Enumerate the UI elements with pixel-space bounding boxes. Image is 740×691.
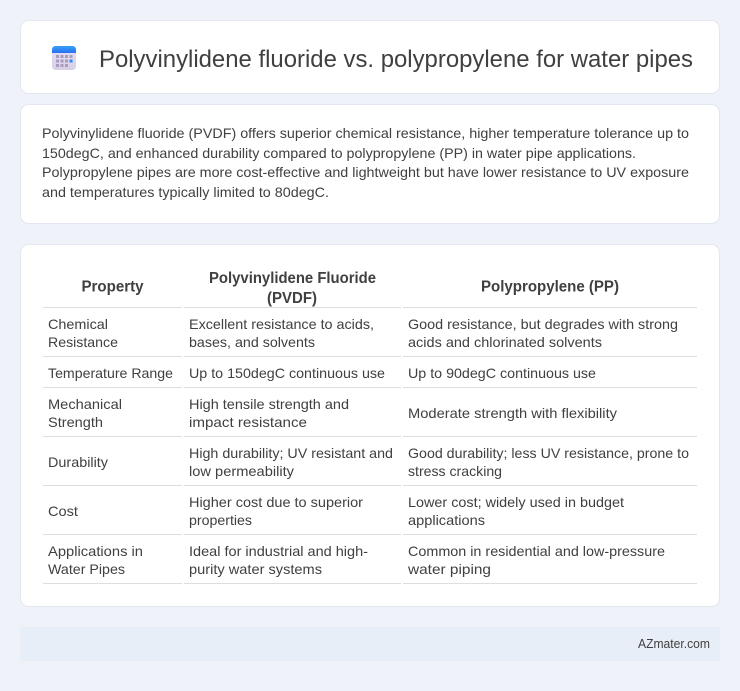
table header — [82, 270, 619, 307]
footer credit: AZmater.com — [638, 637, 710, 651]
row: chemical resistance: Resistance — [48, 334, 118, 350]
panel: summary — [20, 104, 720, 224]
title: Polyvinylidene fluoride vs. polypropylene for water pipes — [99, 46, 693, 73]
row: applications in water pipes: water piping — [407, 561, 491, 577]
table header: (PVDF) — [267, 290, 317, 307]
row: mechanical strength: High tensile strength and — [189, 396, 349, 412]
row: mechanical strength — [48, 396, 617, 430]
row: applications in water pipes: purity water systems — [189, 561, 322, 577]
row: mechanical strength: Mechanical — [48, 396, 122, 412]
row: durability: High durability; UV resistant and — [189, 445, 393, 461]
row: cost — [48, 494, 624, 528]
panel: title card — [20, 20, 720, 94]
row: chemical resistance: bases, and solvents — [189, 334, 315, 350]
row: cost: Cost — [48, 503, 78, 519]
row: mechanical strength: Moderate strength with flexibility — [408, 405, 617, 421]
row: temperature range: Temperature Range — [48, 365, 173, 381]
table header: Polyvinylidene Fluoride — [209, 270, 376, 287]
row: applications in water pipes: Common in residential and low-pressure — [408, 543, 665, 559]
row: cost: properties — [189, 512, 252, 528]
row: temperature range — [48, 365, 596, 381]
row: cost: applications — [408, 512, 485, 528]
table header: Polypropylene (PP) — [481, 278, 619, 296]
row: applications in water pipes: Water Pipes — [48, 561, 125, 577]
row: chemical resistance: Excellent resistance to acids, — [189, 316, 374, 332]
summary text: 150degC, and enhanced durability compared to polypropylene (PP) in water pipe applications. — [42, 145, 636, 161]
row: cost: Lower cost; widely used in budget — [408, 494, 624, 510]
row: chemical resistance: Chemical — [48, 316, 108, 332]
row: temperature range: Up to 150degC continuous use — [189, 365, 385, 381]
summary text: and temperatures typically limited to 80degC. — [42, 184, 329, 200]
summary text — [42, 125, 689, 200]
row: chemical resistance — [48, 316, 678, 350]
row: durability: Durability — [48, 454, 108, 470]
row: mechanical strength: impact resistance — [189, 414, 307, 430]
table header: Property — [82, 278, 144, 296]
summary text: Polypropylene pipes are more cost-effective and lightweight but have lower resistance to UV exposure — [42, 164, 689, 180]
summary text: Polyvinylidene fluoride (PVDF) offers superior chemical resistance, higher temperature tolerance up to — [42, 125, 689, 141]
row: cost: Higher cost due to superior — [189, 494, 363, 510]
row: mechanical strength: Strength — [48, 414, 103, 430]
row: chemical resistance: acids and chlorinated solvents — [408, 334, 602, 350]
row: chemical resistance: Good resistance, but degrades with strong — [408, 316, 678, 332]
row: durability: low permeability — [189, 463, 294, 479]
row: temperature range: Up to 90degC continuous use — [408, 365, 596, 381]
row: durability: Good durability; less UV resistance, prone to — [408, 445, 689, 461]
row: applications in water pipes — [48, 543, 665, 577]
row: applications in water pipes: Ideal for industrial and high- — [189, 543, 368, 559]
panel: comparison table — [20, 244, 720, 606]
row: applications in water pipes: Applications in — [48, 543, 143, 559]
row: durability: stress cracking — [408, 463, 502, 479]
footer bar — [20, 627, 720, 661]
icon: calendar grid — [52, 46, 76, 70]
row: durability — [48, 445, 689, 479]
